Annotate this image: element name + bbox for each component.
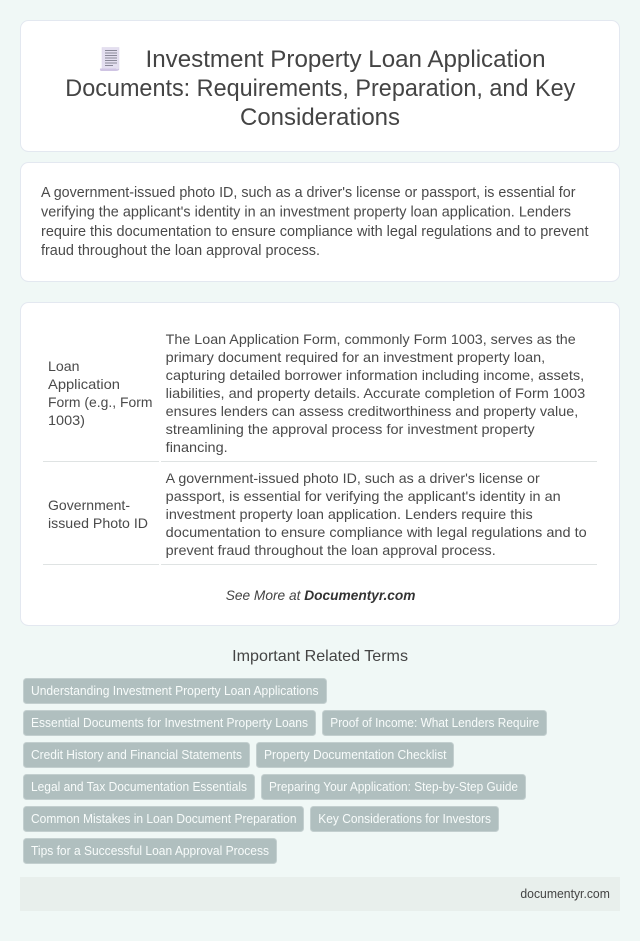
- summary text: require this documentation to ensure compliance with legal regulations and to prevent: [41, 224, 588, 240]
- tag: [24, 710, 316, 736]
- tag: [24, 678, 326, 704]
- row description: government-issued photo id: investment property loan application. Lenders require this: [166, 506, 533, 522]
- tag: [24, 806, 304, 832]
- row description: government-issued photo id: documentation to ensure compliance with legal regulations and to: [166, 524, 587, 540]
- summary text: [41, 185, 588, 259]
- row label: loan application form: [48, 358, 152, 428]
- tag list: related terms: [24, 678, 546, 864]
- panel: documents table: [20, 302, 620, 626]
- tag: Preparing Your Application: Step-by-Step Guide: [269, 780, 518, 794]
- tag: [256, 742, 454, 768]
- row description: government-issued photo id: prevent fraud throughout the loan approval process.: [166, 542, 496, 558]
- tag: [310, 806, 498, 832]
- row description: loan application form: financing.: [166, 439, 228, 455]
- summary text: fraud throughout the loan approval process.: [41, 243, 320, 259]
- tag: [24, 838, 276, 864]
- row label: loan application form: Form (e.g., Form: [48, 394, 152, 410]
- row label: loan application form: Loan: [48, 358, 80, 374]
- icon: document scroll: [100, 48, 119, 71]
- row description: loan application form: capturing detailed borrower information including income, assets,: [166, 367, 584, 383]
- row description: government-issued photo id: [166, 470, 587, 558]
- tag: Proof of Income: What Lenders Require: [330, 716, 539, 730]
- title: Documents: Requirements, Preparation, and Key: [65, 75, 575, 102]
- tag: Common Mistakes in Loan Document Preparation: [31, 812, 297, 826]
- see more link: See More at Documentyr.com: [226, 587, 416, 603]
- tag: Credit History and Financial Statements: [31, 748, 242, 762]
- row description: loan application form: ensures lenders can assess creditworthiness and property value,: [166, 403, 578, 419]
- row label: loan application form: 1003): [48, 412, 85, 428]
- tag: Legal and Tax Documentation Essentials: [31, 780, 247, 794]
- panel: summary paragraph: [20, 162, 620, 282]
- tag: Property Documentation Checklist: [264, 748, 447, 762]
- row label: government-issued photo id: issued Photo ID: [48, 515, 148, 531]
- tag: [262, 774, 526, 800]
- footer text: documentyr.com: [520, 887, 610, 901]
- row description: government-issued photo id: passport, is essential for verifying the applicant's identity in an: [166, 488, 561, 504]
- row label: government-issued photo id: Government-: [48, 497, 130, 513]
- summary text: verifying the applicant's identity in an investment property loan application. Lenders: [41, 204, 571, 220]
- heading: important related terms: Important Related Terms: [232, 648, 408, 665]
- row description: loan application form: liabilities, and property details. Accurate completion of Form 1003: [166, 385, 585, 401]
- title: [65, 46, 575, 131]
- tag: Tips for a Successful Loan Approval Process: [31, 844, 269, 858]
- row description: government-issued photo id: A government-issued photo ID, such as a driver's license or: [166, 470, 540, 486]
- row description: loan application form: streamlining the approval process for investment property: [166, 421, 535, 437]
- tag: [322, 710, 546, 736]
- tag: [24, 774, 254, 800]
- footer bar: [20, 877, 620, 911]
- tag: [24, 742, 250, 768]
- row description: loan application form: [166, 331, 585, 455]
- row label: loan application form: Application: [48, 376, 120, 392]
- tag: Key Considerations for Investors: [318, 812, 491, 826]
- row description: loan application form: primary document required for an investment property loan,: [166, 349, 545, 365]
- tag: Understanding Investment Property Loan Applications: [31, 684, 318, 698]
- summary text: A government-issued photo ID, such as a driver's license or passport, is essential for: [41, 185, 576, 201]
- row description: loan application form: The Loan Application Form, commonly Form 1003, serves as the: [166, 331, 576, 347]
- table row: government-issued photo id: [48, 470, 587, 558]
- table row: loan application form: [48, 331, 585, 455]
- title: Investment Property Loan Application: [146, 46, 546, 73]
- tag: Essential Documents for Investment Property Loans: [31, 716, 308, 730]
- header panel: [20, 20, 620, 152]
- title: Considerations: [240, 104, 400, 131]
- row label: government-issued photo id: [48, 497, 148, 531]
